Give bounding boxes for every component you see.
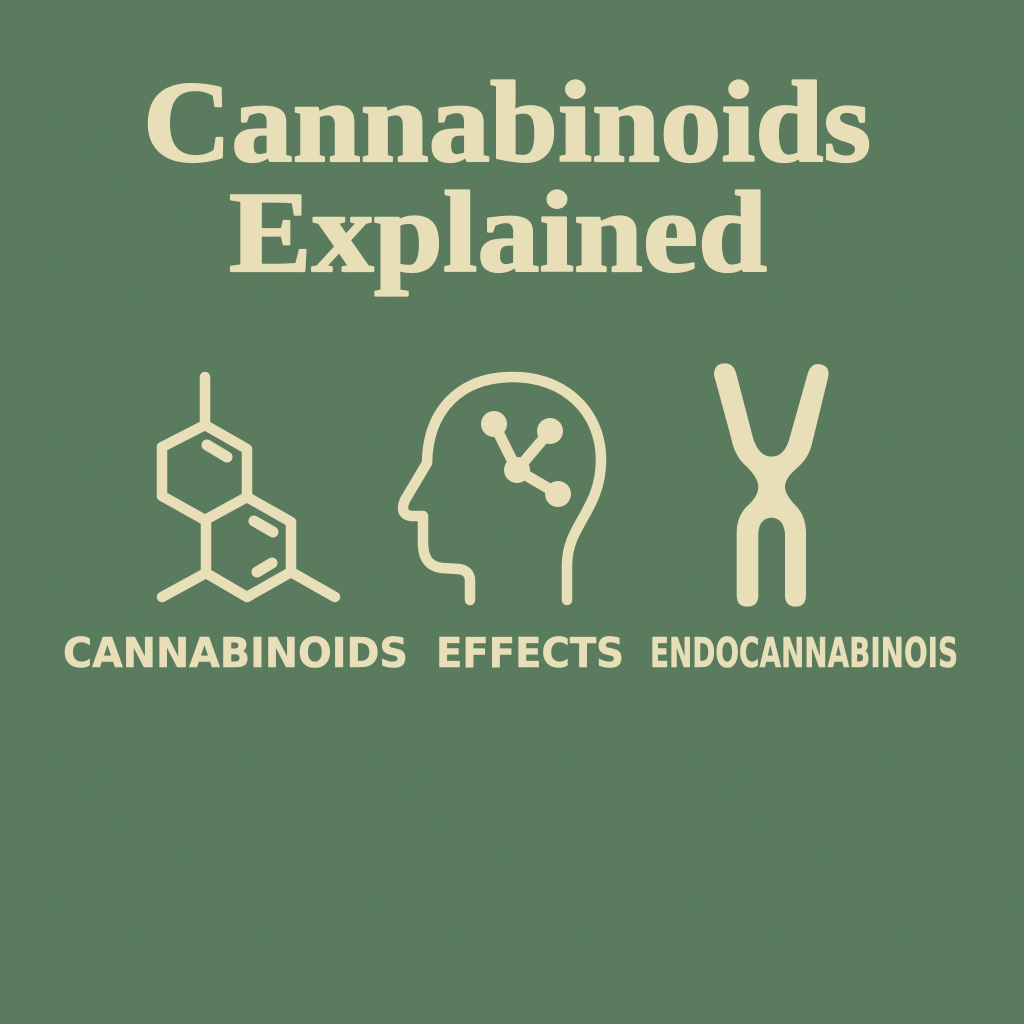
icon: cannabinoid molecule [162, 377, 335, 597]
network links [494, 424, 558, 494]
label: cannabinoids: CANNABINOIDS [63, 629, 408, 677]
label: effects: EFFECTS [436, 629, 624, 677]
title [143, 59, 871, 297]
icon: receptor shape [714, 363, 829, 607]
double bonds [207, 445, 273, 572]
molecule skeleton [162, 377, 335, 597]
icon: head with neural network [403, 377, 601, 600]
head outline [403, 377, 601, 600]
title line 2: Explained [229, 169, 767, 297]
labels [63, 629, 958, 677]
title line 1: Cannabinoids [143, 59, 871, 187]
network nodes [481, 411, 571, 507]
